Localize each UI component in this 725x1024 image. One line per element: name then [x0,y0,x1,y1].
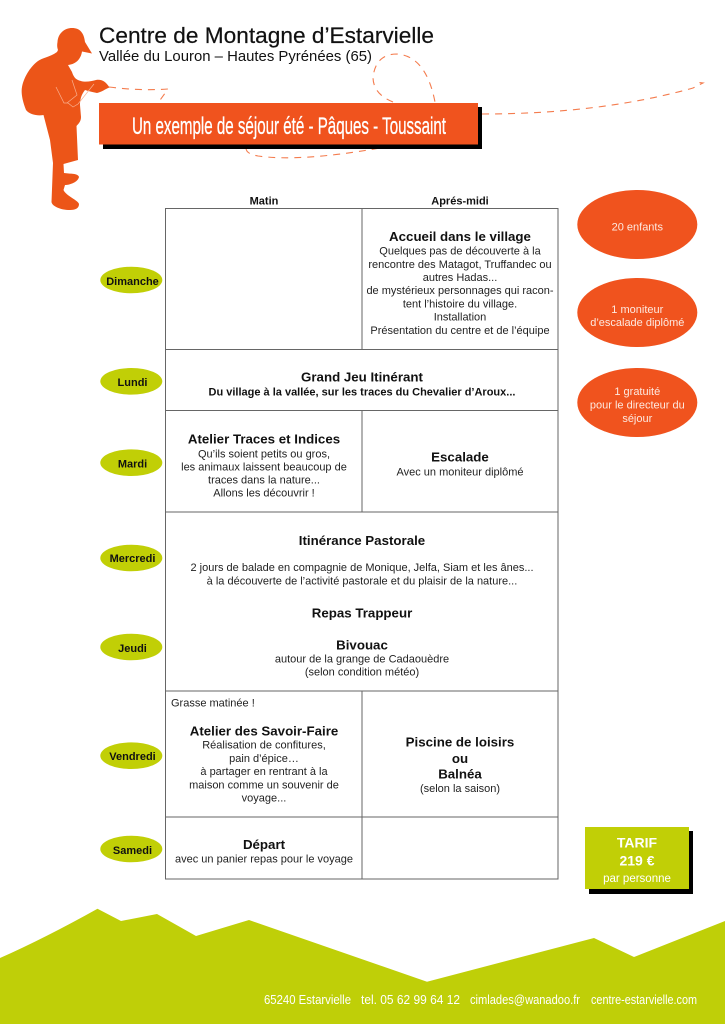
callout: 20 enfants: 20 enfants [612,222,663,234]
cell: Départ [175,837,353,866]
day: Dimanche [100,267,162,293]
day: Jeudi [100,634,162,660]
column heading: Après-midi: Aprés-midi [431,196,489,208]
cell: Accueil dans le village: Accueil dans le village [389,229,531,244]
footer contact: centre-estarvielle.com [591,992,697,1007]
callout: gratuité [577,368,697,437]
cell: Piscine de loisirs: Balnéa [438,767,482,782]
price box [585,827,693,894]
day: Jeudi: Jeudi [118,643,147,655]
price box: 219 € [619,852,655,868]
cell: Escalade: Avec un moniteur diplômé [397,466,523,478]
cell: Atelier Traces et Indices: Allons les découvrir ! [213,488,315,500]
cell: Atelier des Savoir-Faire: voyage... [242,792,286,804]
callout: gratuité: 1 gratuité [614,386,660,398]
cell: Grand Jeu Itinérant: Grand Jeu Itinérant [301,370,424,385]
cell: Itinérance Pastorale: 2 jours de balade en compagnie de Monique, Jelfa, Siam et les ânes... [190,562,534,574]
footer contact [264,992,697,1007]
cell: Itinérance Pastorale: (selon condition météo) [305,667,419,679]
cell: Accueil dans le village: Quelques pas de découverte à la [379,246,542,258]
icon: hiker silhouette [22,28,110,210]
cell: Accueil dans le village [366,229,554,337]
day: Samedi: Samedi [113,845,152,857]
cell: Itinérance Pastorale: Bivouac [336,637,388,652]
day: Mardi [100,449,162,476]
cell: Itinérance Pastorale: Itinérance Pastorale [299,533,425,548]
day: Mercredi [100,545,162,571]
cell: Atelier Traces et Indices: traces dans la nature... [208,475,320,487]
cell: Atelier des Savoir-Faire [171,698,339,804]
day: Dimanche: Dimanche [106,276,159,288]
day: Mercredi: Mercredi [110,553,155,565]
cell: Départ: Départ [243,837,286,852]
banner [99,103,482,149]
price box: par personne [603,873,671,885]
cell: Accueil dans le village: autres Hadas... [423,272,497,284]
cell: Itinérance Pastorale: autour de la grange de Cadaouèdre [275,653,449,665]
cell: Piscine de loisirs [406,735,514,795]
cell: Accueil dans le village: de mystérieux personnages qui racon- [366,285,554,297]
cell: Atelier Traces et Indices [181,432,347,500]
cell: Accueil dans le village: Installation [434,312,486,324]
day: Lundi: Lundi [118,377,147,389]
cell: Atelier des Savoir-Faire: Atelier des Savoir-Faire [190,724,338,739]
cell: Accueil dans le village: rencontre des Matagot, Truffandec ou [368,259,552,271]
day: Lundi [100,368,162,395]
cell: Atelier Traces et Indices: Qu’ils soient petits ou gros, [198,448,330,460]
cell: Atelier des Savoir-Faire: à partager en rentrant à la [200,766,328,778]
cell: Atelier Traces et Indices: les animaux laissent beaucoup de [181,461,347,473]
cell: Piscine de loisirs: (selon la saison) [420,783,500,795]
cell: Piscine de loisirs: Piscine de loisirs [406,735,514,750]
schedule table grid [166,208,558,879]
title: Centre de Montagne d’Estarvielle [99,23,434,48]
footer contact: cimlades@wanadoo.fr [470,992,581,1007]
cell: Atelier Traces et Indices: Atelier Traces et Indices [188,432,340,447]
cell: Départ: avec un panier repas pour le voyage [175,854,353,866]
callout: gratuité: pour le directeur du [590,400,685,412]
callout: moniteur [577,278,697,347]
day: Mardi: Mardi [118,458,147,470]
mountain footer [0,909,725,1024]
cell: Grand Jeu Itinérant [209,370,515,399]
day: Vendredi: Vendredi [109,751,156,763]
footer contact: tel. 05 62 99 64 12 [361,992,460,1007]
cell: Escalade [397,450,523,478]
price box: TARIF [617,835,658,851]
cell: Grand Jeu Itinérant: Du village à la vallée, sur les traces du Chevalier d’Aroux... [209,387,515,399]
cell: Accueil dans le village: Présentation du centre et de l’équipe [370,325,550,337]
cell: Escalade: Escalade [431,450,489,465]
cell: Itinérance Pastorale: Repas Trappeur [312,605,412,620]
column heading: Matin: Matin [250,196,279,208]
banner: Un exemple de séjour été - Pâques - Toussaint [132,113,446,140]
callout: gratuité: séjour [622,413,653,425]
subtitle: Vallée du Louron – Hautes Pyrénées (65) [99,48,372,65]
footer contact: 65240 Estarvielle [264,992,351,1007]
dashed trail [109,54,703,158]
cell: Itinérance Pastorale: à la découverte de l’activité pastorale et du plaisir de la nature... [207,575,517,587]
day: Samedi [100,836,162,862]
cell: Atelier des Savoir-Faire: maison comme un souvenir de [189,779,339,791]
cell: Atelier des Savoir-Faire: Réalisation de confitures, [202,740,326,752]
day: Vendredi [100,742,162,769]
callout: moniteur: 1 moniteur [611,304,664,316]
callout: moniteur: d’escalade diplômé [590,317,684,329]
cell: Itinérance Pastorale [190,533,534,679]
callout: 20 enfants [577,190,697,259]
cell: Atelier des Savoir-Faire: pain d’épice… [229,753,299,765]
cell: Piscine de loisirs: ou [452,751,468,766]
cell: Atelier des Savoir-Faire: Grasse matinée ! [171,698,255,710]
cell: Accueil dans le village: tent l’histoire du village. [403,298,517,310]
